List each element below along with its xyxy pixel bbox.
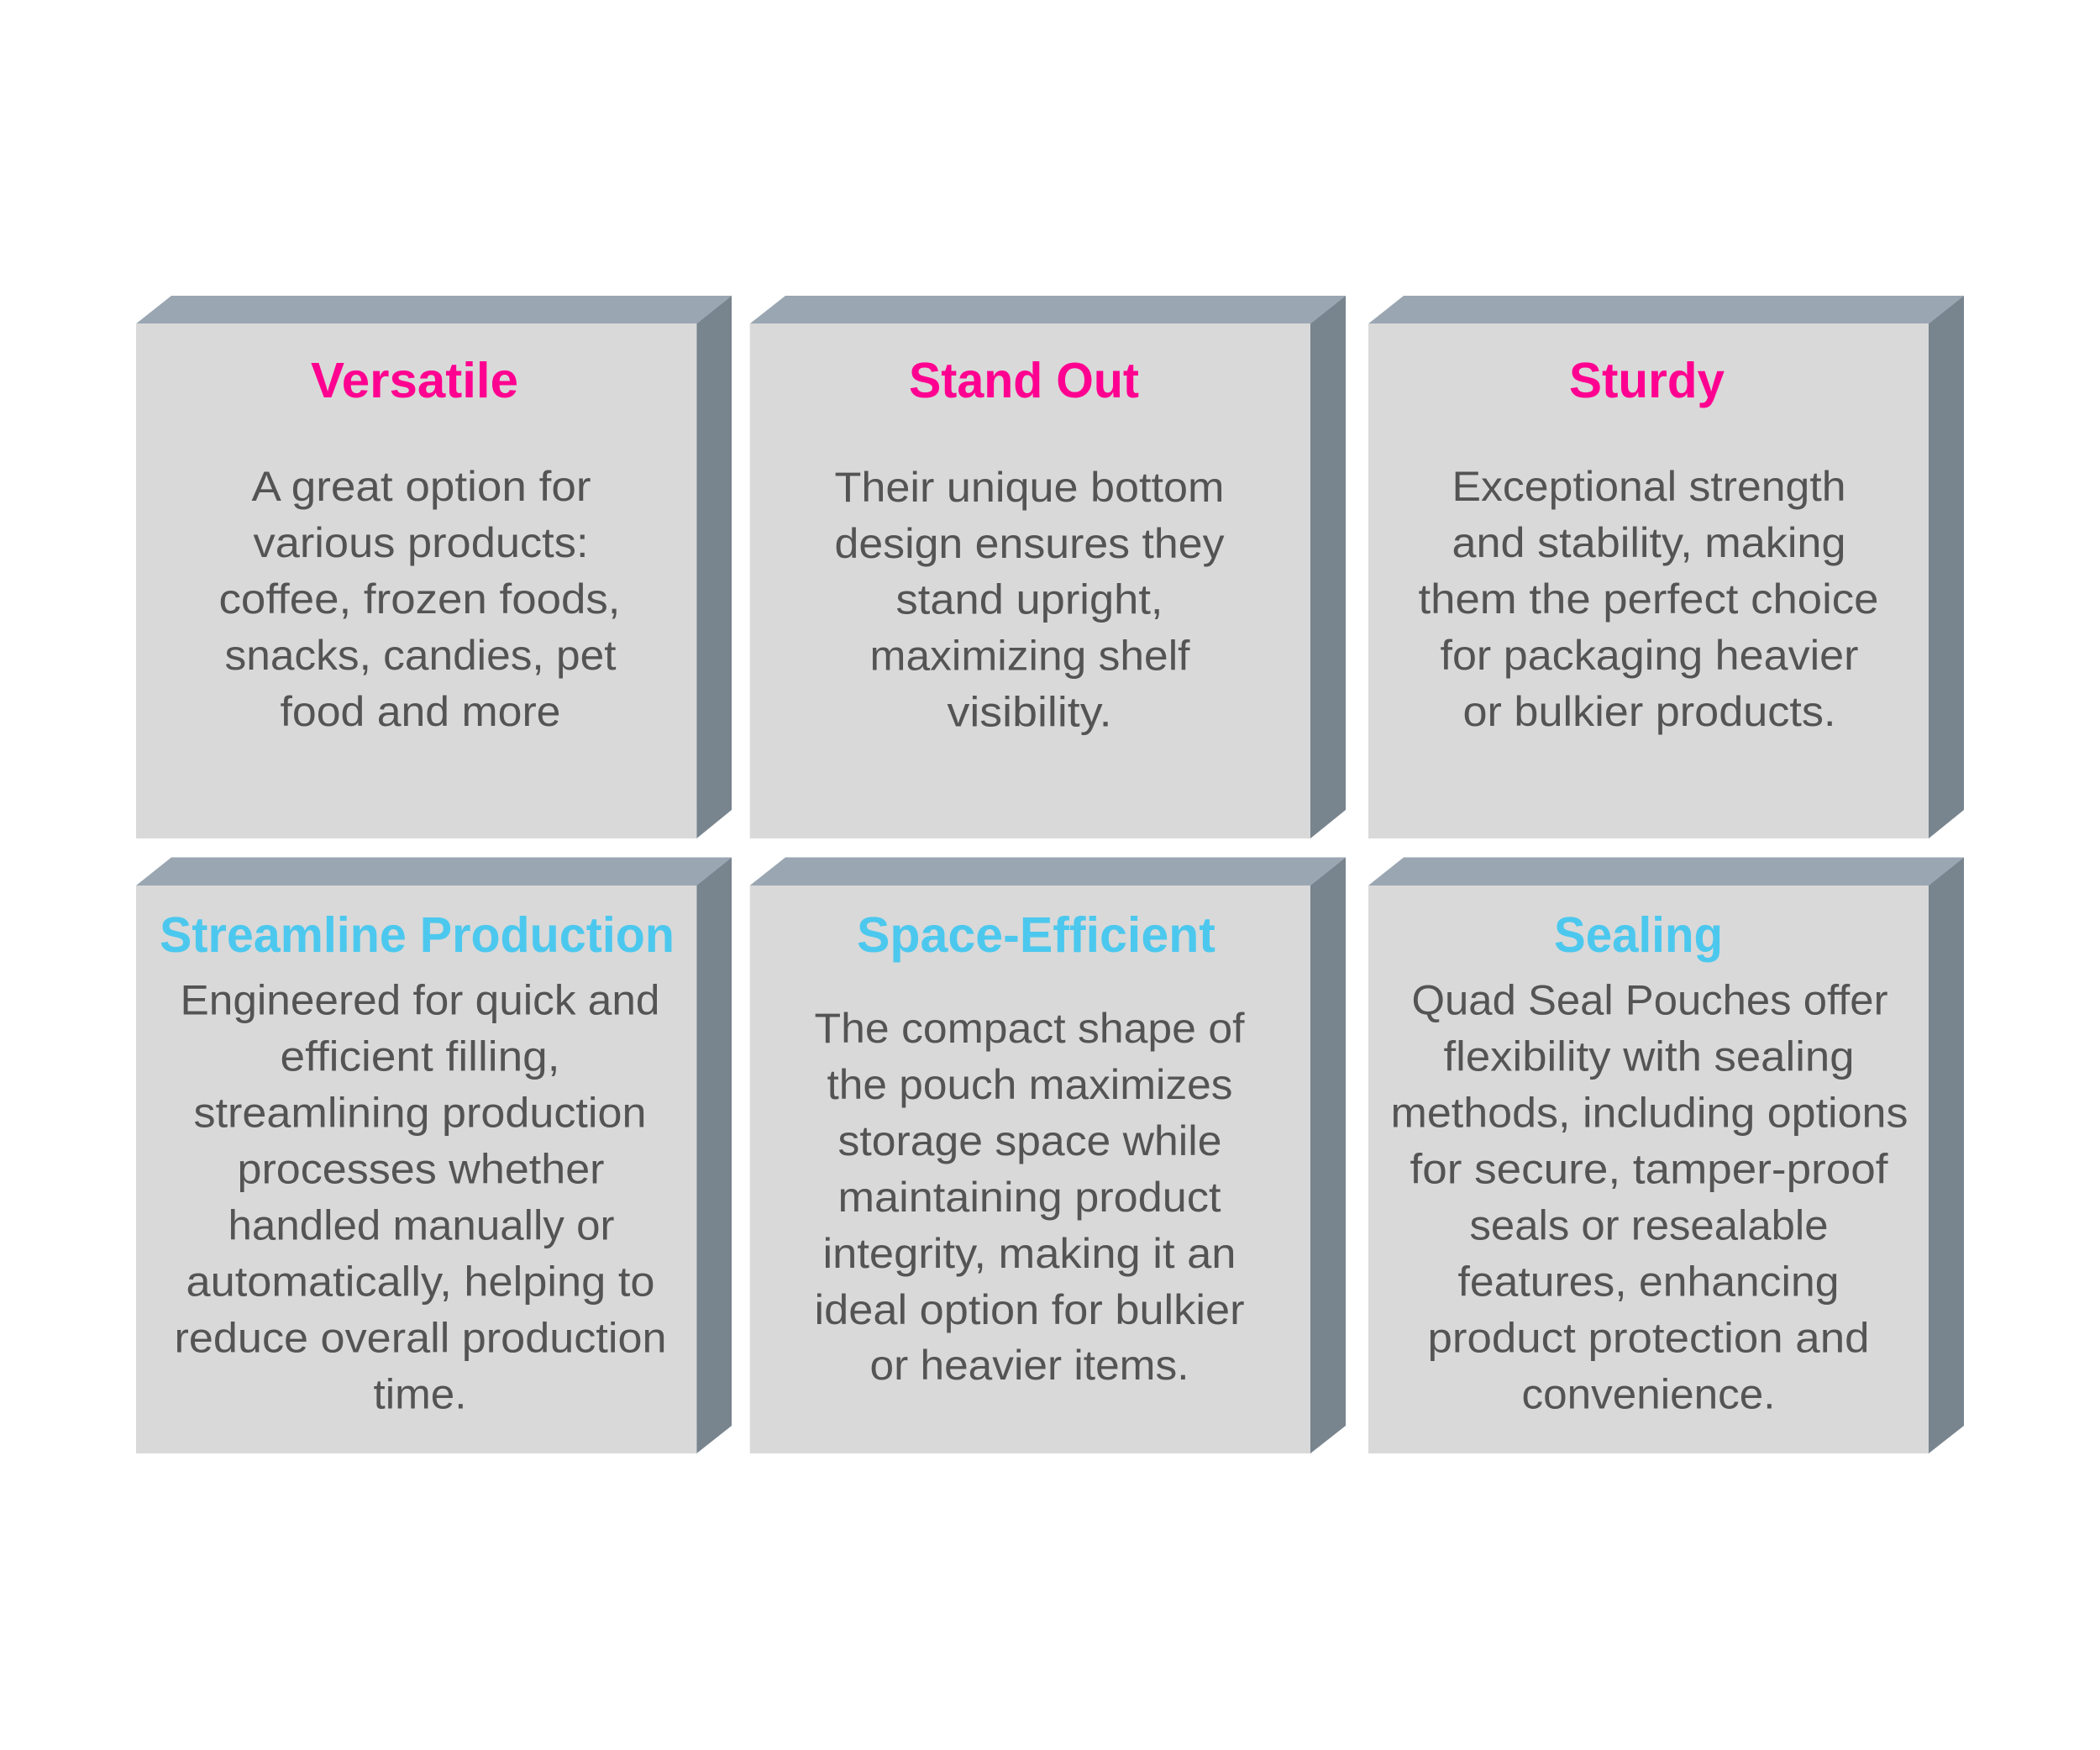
box side face [1929,857,1964,1453]
body text: Streamline Production: time. [373,1369,467,1418]
box top face [1368,296,1964,323]
body text: Versatile [218,462,620,735]
body text: Streamline Production [175,976,667,1418]
body text: Sealing: for secure, tamper-proof [1410,1144,1889,1193]
body text: Stand Out: maximizing shelf [870,632,1190,679]
body text: Sturdy: Exceptional strength [1452,462,1846,510]
body text: Sealing: seals or resealable [1470,1201,1828,1248]
body text: Space-Efficient: ideal option for bulkier [815,1285,1245,1333]
body text: Streamline Production: reduce overall production [175,1314,667,1361]
heading: Sealing: Sealing [1554,907,1723,963]
body text: Sturdy: them the perfect choice [1418,575,1878,623]
box side face [696,857,732,1453]
body text: Space-Efficient [815,1004,1245,1389]
box front face [750,886,1310,1453]
box top face [1368,857,1964,886]
panel: Versatile [136,296,732,838]
box side face [1310,296,1346,838]
box front face [136,323,696,838]
body text: Sealing [1391,976,1908,1418]
box side face [696,296,732,838]
body text: Space-Efficient: integrity, making it an [823,1229,1236,1277]
heading: Versatile: Versatile [311,353,518,408]
box front face [1368,886,1929,1453]
body text: Space-Efficient: The compact shape of [815,1004,1245,1052]
body text: Space-Efficient: maintaining product [838,1173,1221,1221]
body text: Sealing: product protection and [1428,1314,1870,1361]
body text: Versatile: A great option for [252,462,591,510]
body text: Sturdy: or bulkier products. [1463,687,1836,735]
panel: Sealing [1368,857,1964,1453]
body text: Sealing: convenience. [1522,1369,1776,1418]
box front face [136,886,696,1453]
body text: Streamline Production: efficient filling, [281,1032,559,1080]
body text: Sturdy: and stability, making [1452,518,1846,566]
body text: Streamline Production: handled manually or [228,1201,615,1248]
body text: Sealing: methods, including options [1391,1089,1908,1136]
body text: Versatile: coffee, frozen foods, [218,575,620,623]
body text: Stand Out: stand upright, [895,575,1163,623]
body text: Streamline Production: automatically, helping to [186,1257,655,1306]
body text: Sealing: features, enhancing [1458,1257,1840,1306]
box front face [1368,323,1929,838]
heading: Streamline Production: Streamline Production [160,907,675,963]
body text: Streamline Production: processes whether [237,1144,605,1193]
body text: Streamline Production: Engineered for quick and [180,976,660,1023]
body text: Sealing: flexibility with sealing [1443,1032,1855,1080]
body text: Sturdy [1418,462,1878,735]
heading: Space-Efficient: Space-Efficient [857,907,1215,963]
body text: Versatile: various products: [254,518,588,566]
box top face [750,296,1346,323]
body text: Space-Efficient: the pouch maximizes [827,1060,1233,1108]
heading: Stand Out: Stand Out [909,353,1139,408]
panel: Streamline Production [136,857,732,1453]
body text: Sturdy: for packaging heavier [1440,631,1858,679]
body text: Sealing: Quad Seal Pouches offer [1411,976,1888,1023]
box side face [1929,296,1964,838]
body text: Space-Efficient: storage space while [838,1117,1221,1164]
body text: Space-Efficient: or heavier items. [870,1341,1189,1389]
panel: Stand Out [750,296,1346,838]
body text: Stand Out [835,463,1225,736]
body text: Stand Out: design ensures they [835,519,1225,567]
box side face [1310,857,1346,1453]
heading: Sturdy: Sturdy [1569,353,1725,408]
body text: Versatile: food and more [281,687,561,735]
box top face [750,857,1346,886]
panel: Space-Efficient [750,857,1346,1453]
body text: Stand Out: Their unique bottom [835,463,1225,511]
panel: Sturdy [1368,296,1964,838]
body text: Versatile: snacks, candies, pet [225,631,617,679]
box top face [136,296,732,323]
box front face [750,323,1310,838]
body text: Streamline Production: streamlining production [193,1089,647,1136]
box top face [136,857,732,886]
body text: Stand Out: visibility. [948,687,1112,736]
